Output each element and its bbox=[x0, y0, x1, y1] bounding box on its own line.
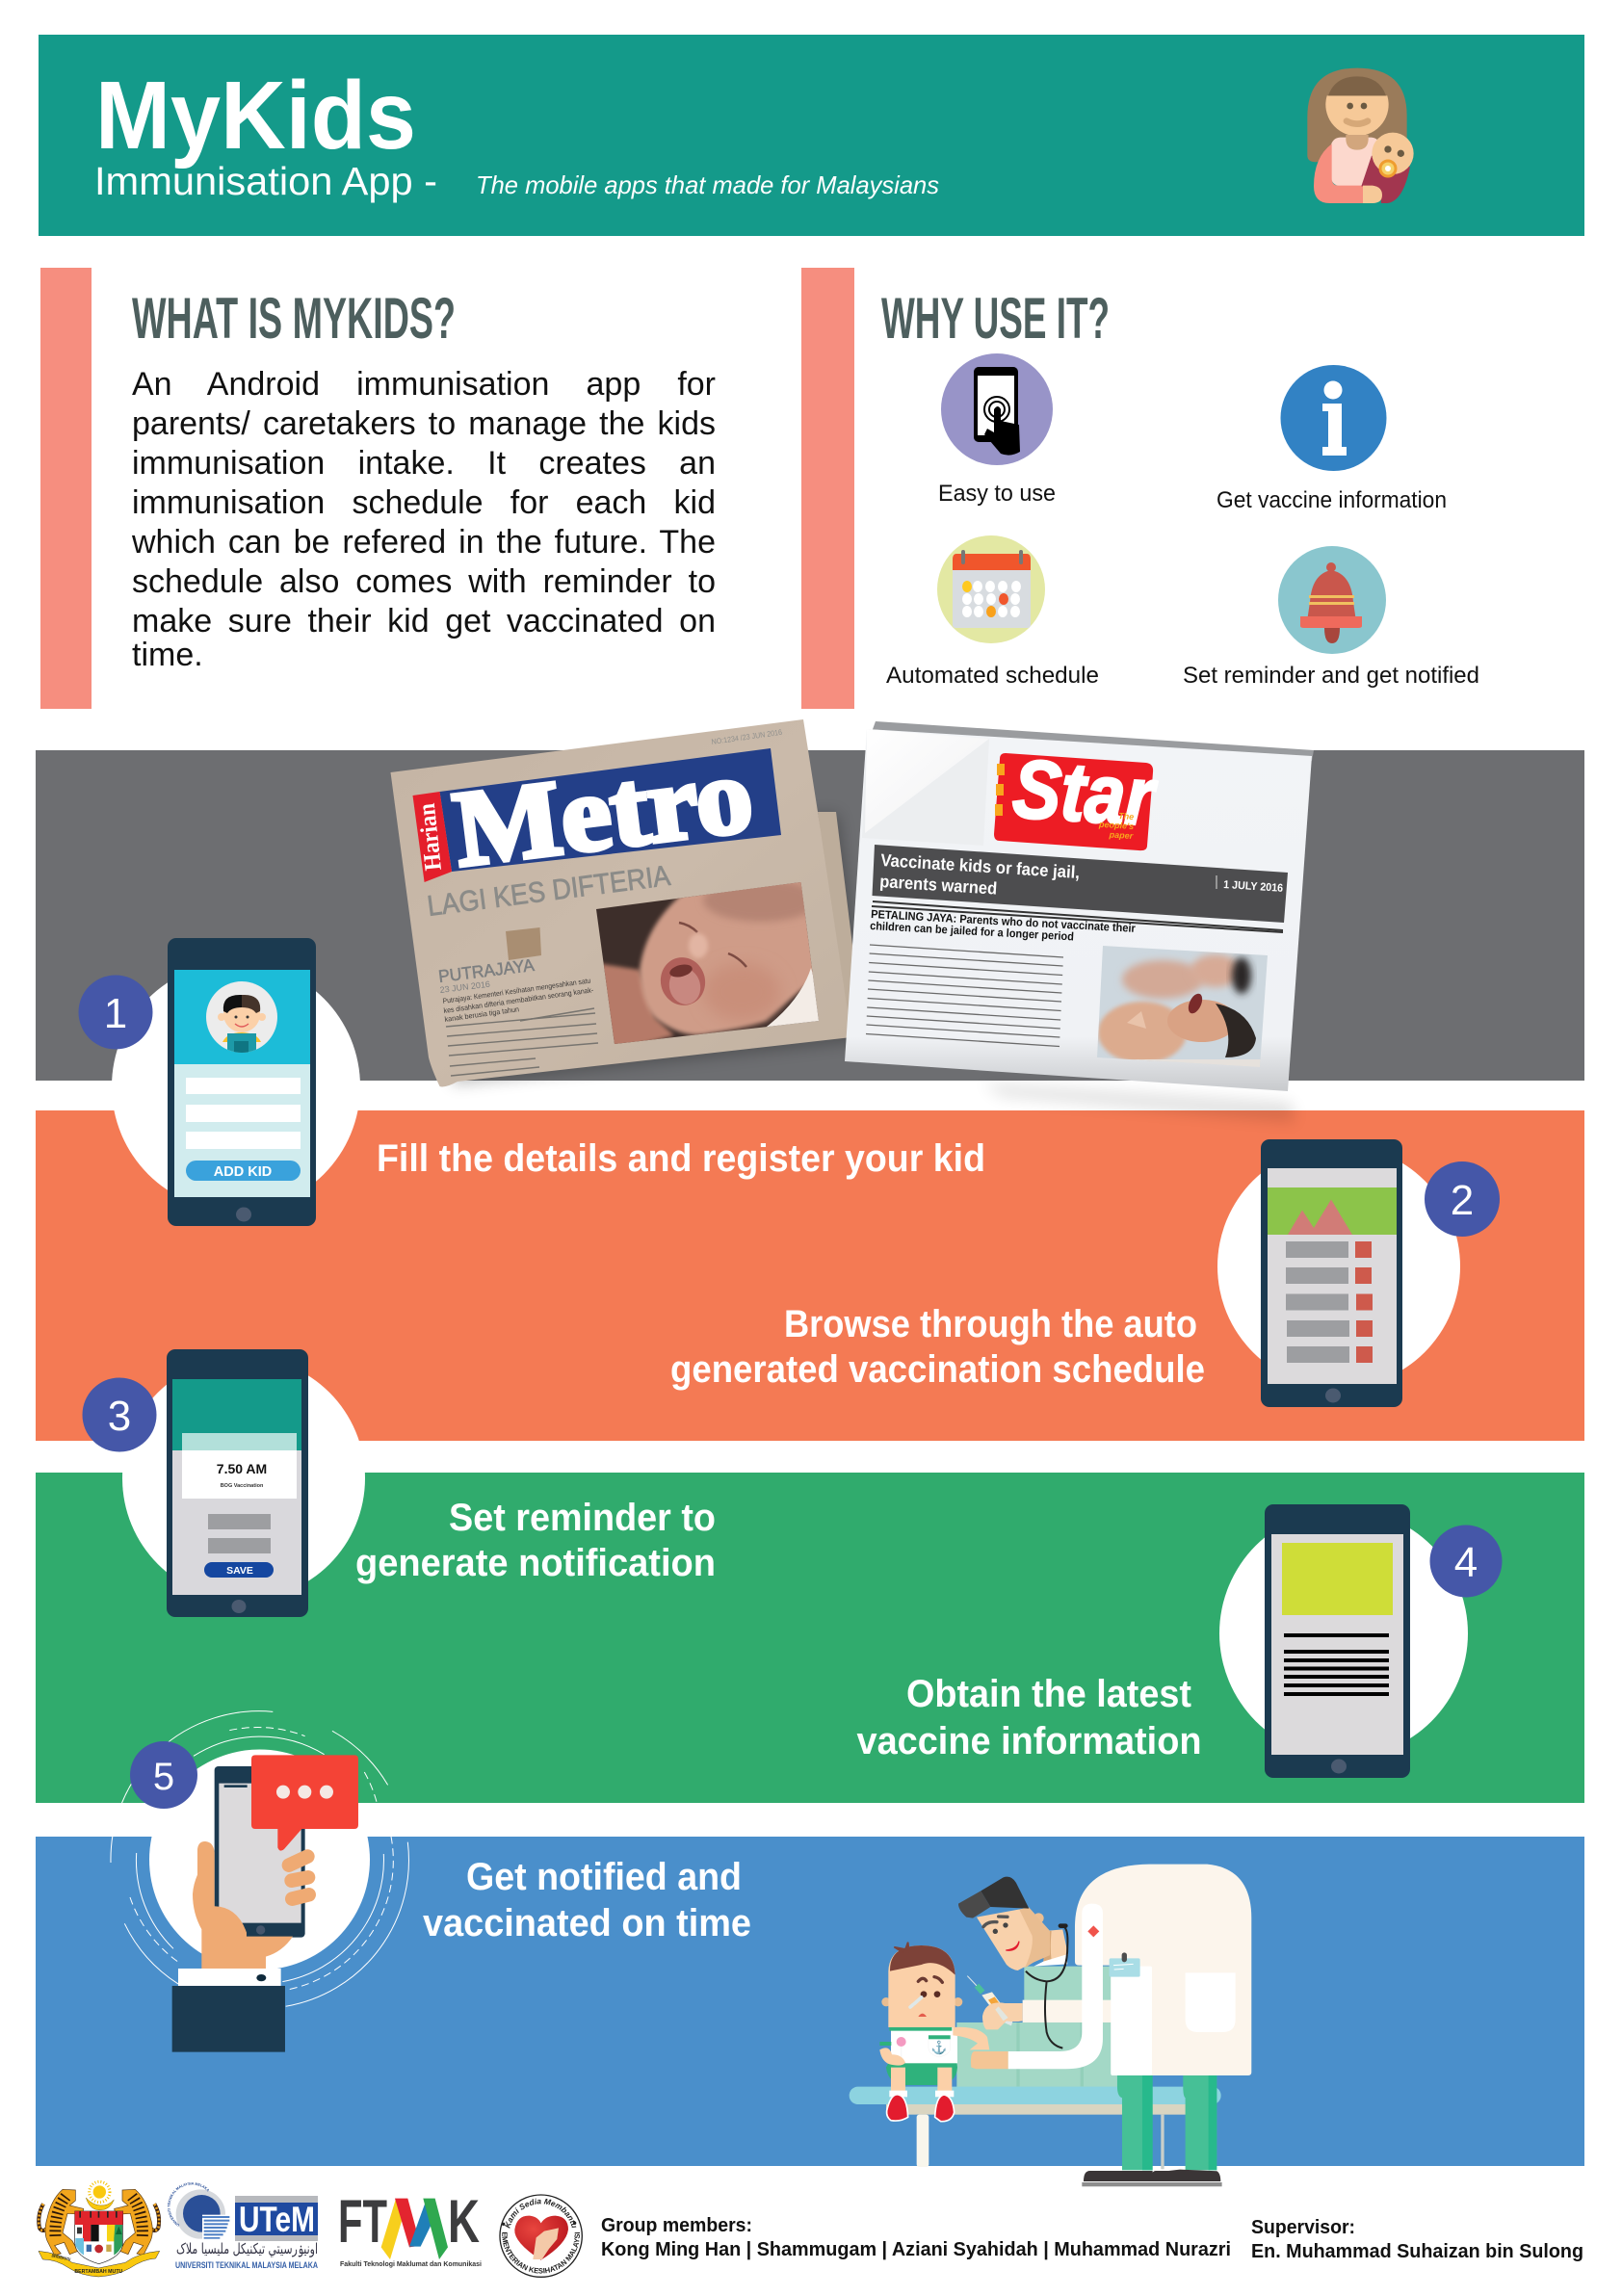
metro article text: kanak berusia tiga tahun bbox=[444, 1004, 520, 1024]
UTeM globe: UNIVERSITI TEKNIKAL MALAYSIA MELAKA bbox=[168, 2182, 209, 2227]
icon: vaccine information bbox=[1281, 365, 1387, 471]
step 2 text: Browse through the auto bbox=[784, 1303, 1197, 1345]
sun and crescent bbox=[86, 2181, 114, 2210]
alarm label: BOG Vaccination bbox=[221, 1483, 264, 1489]
step 3 text: generate notification bbox=[355, 1542, 716, 1584]
logo: FTMK: FT bbox=[338, 2188, 387, 2256]
text block: what is mykids description: parents/ caretakers to manage the kids bbox=[132, 405, 716, 442]
step 4 text: Obtain the latest bbox=[906, 1673, 1191, 1715]
credits: supervisor: Supervisor: bbox=[1251, 2217, 1355, 2238]
table and scrubs backdrop bbox=[956, 2022, 1117, 2090]
doctor legs bbox=[1117, 2075, 1153, 2170]
band: step 1 and 2 orange bbox=[36, 1110, 1584, 1441]
text block: what is mykids description: time. bbox=[132, 637, 203, 673]
star babies photo bbox=[1097, 946, 1268, 1067]
logo: Ministry of Health: Kami Sedia Membantu bbox=[505, 2198, 576, 2229]
badge 5: 5 bbox=[153, 1756, 174, 1798]
heading: what is mykids: WHAT IS MYKIDS? bbox=[132, 286, 456, 351]
step 5 text: Get notified and bbox=[466, 1856, 742, 1898]
UTeM jawi name: اونيۏرسيتي تيكنيکل مليسيا ملاک bbox=[176, 2240, 318, 2258]
UTeM box bbox=[235, 2203, 318, 2235]
metro headline: LAGI KES DIFTERIA bbox=[426, 860, 672, 923]
step 1 phone bbox=[168, 938, 316, 1226]
doctor head bbox=[958, 1877, 1068, 1970]
label: vaccine information: Get vaccine information bbox=[1216, 487, 1447, 513]
stethoscope bbox=[1026, 1926, 1067, 2048]
save button: SAVE bbox=[226, 1565, 253, 1577]
badge 1 bbox=[79, 975, 152, 1050]
shield bbox=[75, 2211, 123, 2264]
logo: FTMK bbox=[338, 2188, 482, 2268]
UTeM name: UNIVERSITI TEKNIKAL MALAYSIA MELAKA bbox=[175, 2260, 318, 2270]
star lede rules bbox=[872, 901, 1283, 932]
step 5 text bbox=[423, 1856, 751, 1944]
step 2 phone bbox=[1261, 1139, 1402, 1407]
tagline: The mobile apps that made for Malaysians bbox=[476, 170, 939, 199]
step 3: white circle bbox=[122, 1357, 365, 1600]
metro issue number: NO:1234 /23 JUN 2016 bbox=[711, 728, 783, 746]
logo: UTeM bbox=[168, 2182, 318, 2270]
motto ribbon: BERTAMBAH MUTU bbox=[74, 2269, 122, 2275]
doctor coat bbox=[1075, 1865, 1251, 2075]
doctor arm bbox=[1008, 1904, 1103, 2069]
band: step 3 and 4 green bbox=[36, 1473, 1584, 1803]
step 3 text bbox=[355, 1497, 716, 1584]
add kid button: ADD KID bbox=[214, 1164, 272, 1180]
logo: Ministry of Health bbox=[499, 2194, 583, 2278]
metro article text: Putrajaya: Kementeri Kesihatan mengesahkan satu bbox=[442, 976, 591, 1005]
text block: what is mykids description bbox=[132, 366, 716, 673]
metro dateline: PUTRAJAYA bbox=[437, 955, 536, 986]
kid avatar bbox=[206, 981, 277, 1053]
id badge bbox=[1110, 1952, 1140, 1977]
add kid button bbox=[186, 1161, 301, 1181]
text block: what is mykids description: which can be refered in the future. The bbox=[132, 524, 716, 561]
speech bubble bbox=[251, 1755, 358, 1851]
metro article text: kes disahkan difteria membabitkan seorang kanak- bbox=[443, 985, 594, 1015]
step 2 text bbox=[670, 1303, 1205, 1391]
UTeM globe bbox=[168, 2182, 229, 2239]
metro masthead: Harian bbox=[414, 802, 447, 872]
alarm time: 7.50 AM bbox=[217, 1461, 267, 1476]
step 2 text: generated vaccination schedule bbox=[670, 1348, 1205, 1391]
right tiger bbox=[115, 2189, 159, 2256]
doctor forearm bbox=[1023, 2000, 1115, 2022]
label: set reminder: Set reminder and get notified bbox=[1183, 663, 1479, 689]
step 5 text: vaccinated on time bbox=[423, 1902, 751, 1944]
title: MyKids: MyKids bbox=[95, 62, 416, 170]
star logo: paper bbox=[1108, 829, 1134, 841]
logo: Malaysia coat of arms bbox=[39, 2181, 160, 2277]
star lede: PETALING JAYA: Parents who do not vaccinate their bbox=[871, 907, 1136, 935]
step 1: white circle bbox=[112, 962, 360, 1211]
logo: Ministry of Health: KEMENTERIAN KESIHATAN MALAYSIA bbox=[502, 2232, 580, 2274]
FTMK name: Fakulti Teknologi Maklumat dan Komunikasi bbox=[340, 2259, 482, 2268]
star date: 1 JULY 2016 bbox=[1223, 879, 1283, 895]
metro article text bbox=[442, 976, 594, 1024]
badge 4 bbox=[1429, 1526, 1503, 1597]
text block: what is mykids description: make sure their kid get vaccinated on bbox=[132, 603, 716, 639]
step 3 phone bbox=[167, 1349, 308, 1617]
label: automated schedule: Automated schedule bbox=[886, 663, 1099, 689]
star headline: Vaccinate kids or face jail, bbox=[880, 850, 1081, 882]
motto ribbon bbox=[39, 2251, 160, 2277]
step 4 text bbox=[857, 1673, 1202, 1762]
credits: group members: Group members: bbox=[601, 2215, 752, 2236]
metro ad square bbox=[506, 927, 541, 960]
save button bbox=[204, 1562, 274, 1578]
illustration: doctor vaccinating child bbox=[850, 1865, 1251, 2186]
star headline: parents warned bbox=[879, 872, 998, 899]
step 5: white circle bbox=[149, 1749, 370, 1970]
heading: why use it: WHY USE IT? bbox=[881, 286, 1110, 351]
step 5 illustration: hand holding phone bbox=[111, 1711, 408, 2052]
signal arcs bbox=[111, 1711, 408, 2006]
metro date: 23 JUN 2016 bbox=[439, 979, 490, 995]
icon: easy to use bbox=[941, 353, 1053, 465]
star lede: children can be jailed for a longer period bbox=[870, 919, 1074, 943]
star logo: Star bbox=[1010, 743, 1160, 844]
subtitle: Immunisation App - bbox=[94, 159, 437, 203]
step 4 phone bbox=[1265, 1504, 1410, 1778]
badge 4: 4 bbox=[1454, 1539, 1478, 1586]
step 3 text: Set reminder to bbox=[449, 1497, 716, 1539]
header banner bbox=[39, 35, 1584, 236]
star date bbox=[1216, 875, 1283, 895]
step 1 text: Fill the details and register your kid bbox=[377, 1137, 985, 1180]
icon: mother and baby bbox=[1307, 68, 1414, 203]
star headline bbox=[879, 850, 1081, 899]
motto ribbon: BERSEKUTU bbox=[51, 2253, 71, 2261]
text block: what is mykids description: immunisation schedule for each kid bbox=[132, 484, 716, 521]
child: ⚓ bbox=[931, 2040, 947, 2055]
star headline bar bbox=[873, 845, 1288, 923]
badge 5 bbox=[130, 1741, 197, 1809]
logo: FTMK: K bbox=[448, 2188, 480, 2256]
badge 3 bbox=[83, 1377, 156, 1452]
text block: what is mykids description: An Android immunisation app for bbox=[132, 366, 716, 403]
child bbox=[879, 1943, 989, 2122]
band: news gray bbox=[36, 750, 1584, 1081]
text block: what is mykids description: immunisation intake. It creates an bbox=[132, 445, 716, 482]
icon: reminder bell bbox=[1278, 546, 1386, 654]
newspaper: Harian Metro bbox=[391, 719, 867, 1086]
step 2: white circle bbox=[1217, 1145, 1460, 1388]
page curl bbox=[862, 729, 989, 846]
star logo: The bbox=[1118, 811, 1134, 822]
text block: what is mykids description: schedule also comes with reminder to bbox=[132, 563, 716, 600]
band: step 5 blue bbox=[36, 1837, 1584, 2166]
badge 1: 1 bbox=[104, 990, 127, 1037]
left tiger bbox=[39, 2189, 84, 2256]
label: easy to use: Easy to use bbox=[938, 481, 1056, 507]
credits: supervisor: En. Muhammad Suhaizan bin Sulong bbox=[1251, 2241, 1583, 2262]
credits: group members bbox=[601, 2215, 1231, 2260]
metro masthead: Metro bbox=[448, 735, 759, 890]
credits: group members: Kong Ming Han | Shammugam | Aziani Syahidah | Muhammad Nurazri bbox=[601, 2239, 1231, 2260]
panel: what is mykids accent bar bbox=[40, 268, 92, 709]
credits: supervisor bbox=[1251, 2217, 1583, 2262]
newspaper: The Star bbox=[845, 721, 1314, 1122]
step 4 text: vaccine information bbox=[857, 1720, 1202, 1762]
star logo: people's bbox=[1098, 820, 1134, 831]
badge 3: 3 bbox=[108, 1393, 131, 1440]
UTeM wordmark: UTeM bbox=[239, 2200, 315, 2239]
icon: automated schedule bbox=[937, 535, 1045, 643]
step 4: white circle bbox=[1219, 1509, 1468, 1758]
badge 2 bbox=[1425, 1161, 1500, 1237]
badge 2: 2 bbox=[1451, 1177, 1474, 1224]
panel: why use it accent bar bbox=[801, 268, 854, 709]
syringe bbox=[967, 1976, 1023, 2029]
metro baby photo bbox=[596, 882, 819, 1044]
